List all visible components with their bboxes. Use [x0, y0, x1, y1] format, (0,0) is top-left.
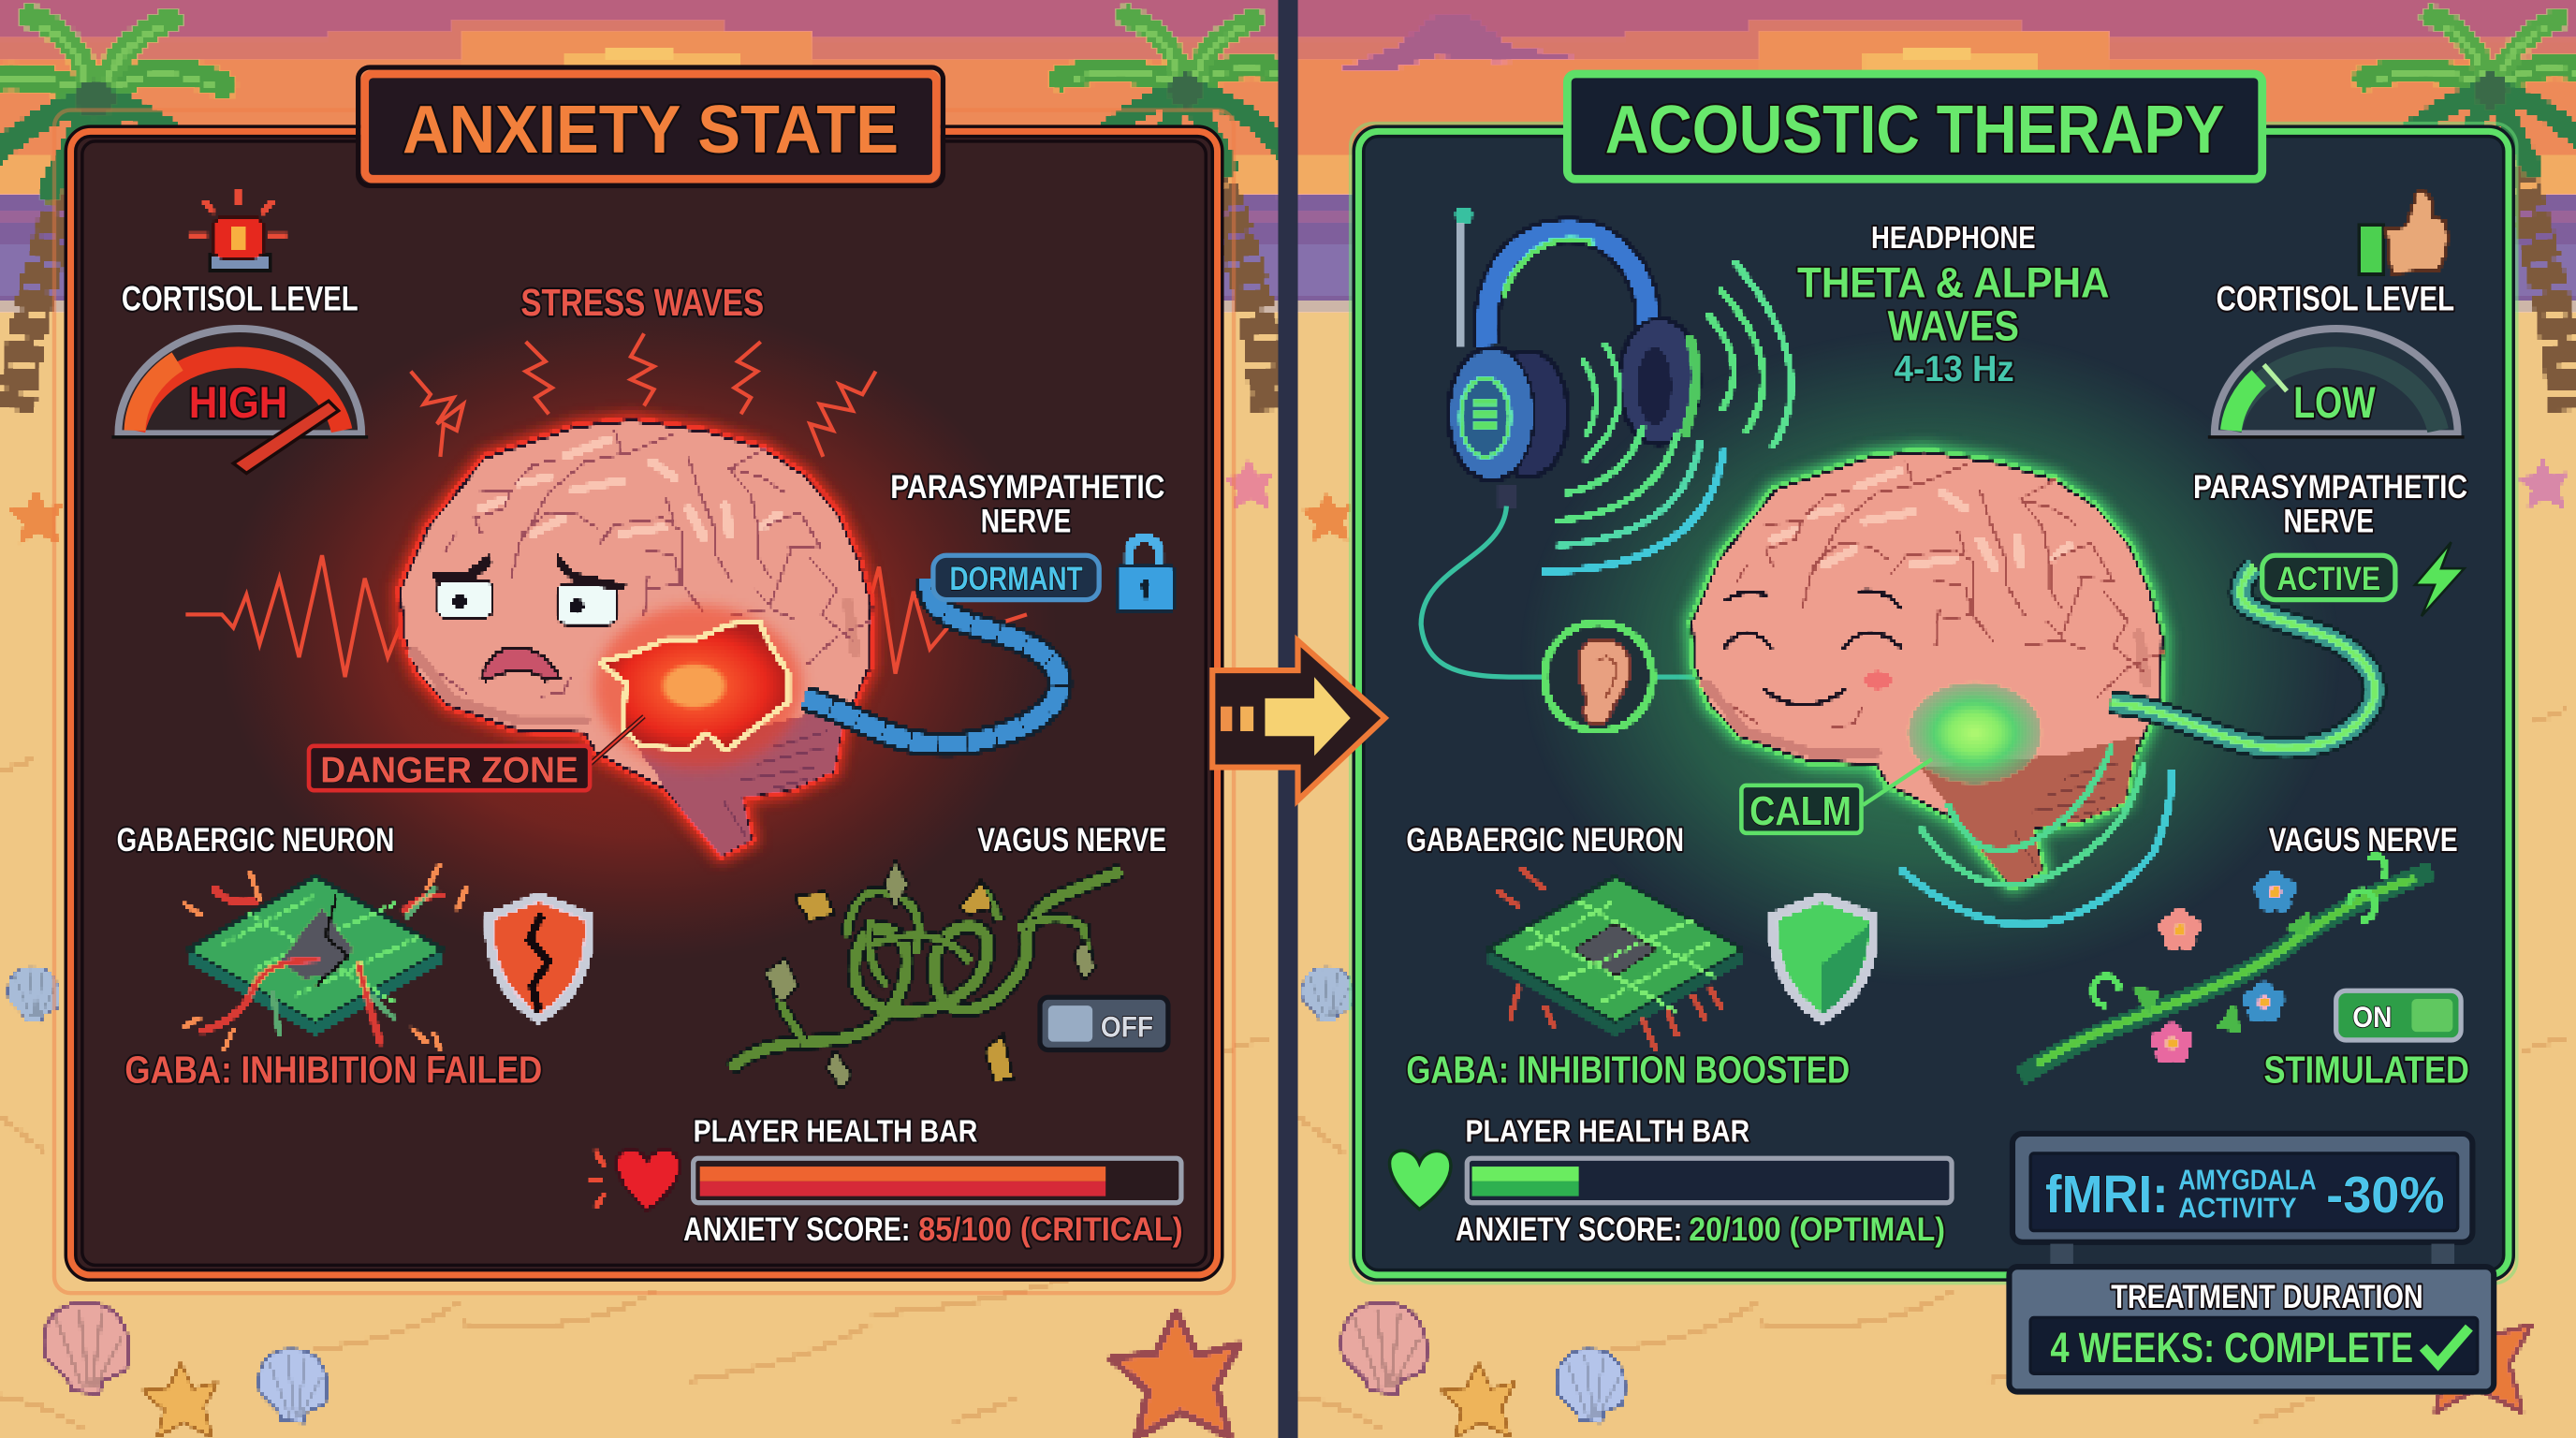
panel: treatment duration: TREATMENT DURATION — [2111, 1279, 2423, 1315]
anxiety score: critical — [683, 1211, 1183, 1248]
health bar: 20 percent — [1467, 1158, 1952, 1203]
icon: lock — [1117, 538, 1173, 611]
callout: danger zone: DANGER ZONE — [320, 750, 578, 790]
panel: treatment duration: 4 WEEKS: COMPLETE — [2050, 1324, 2413, 1372]
face: smiling — [1725, 591, 1901, 705]
illustration: blue parasympathetic nerve — [805, 579, 1060, 744]
arrow: anxiety to therapy — [1212, 640, 1385, 800]
icon: ear — [1544, 623, 1653, 731]
icon: purple cloud — [1339, 13, 1586, 69]
amygdala: calm — [1908, 682, 2042, 784]
label: frequency: 4-13 Hz — [1895, 349, 2014, 389]
label: parasympathetic nerve: PARASYMPATHETIC — [2193, 469, 2467, 506]
icon: broken chip — [184, 862, 466, 1051]
label: gabaergic neuron: GABAERGIC NEURON — [117, 822, 394, 858]
icon: healthy chip — [1488, 868, 1741, 1051]
icon: right beach palm — [1061, 17, 1301, 411]
illustration: anxious brain — [401, 420, 871, 855]
gauge: low cortisol: LOW — [2293, 378, 2376, 428]
sound waves below brain — [1902, 748, 2172, 924]
icon: palm tree — [2364, 17, 2576, 411]
panel: fMRI readout — [2012, 1134, 2472, 1267]
cerebellum and brain stem — [627, 703, 848, 855]
icon: green shield — [1773, 897, 1874, 1019]
illustration: headphones — [1449, 207, 1699, 507]
panel: fMRI readout: fMRI: — [2045, 1165, 2169, 1224]
callout: calm — [1741, 759, 1932, 834]
title: anxiety state: ANXIETY STATE — [402, 93, 899, 168]
health bar: 85 percent — [694, 1158, 1181, 1203]
cable to ear — [1421, 506, 1695, 677]
face: worried — [431, 550, 627, 681]
badge: dormant: DORMANT — [949, 561, 1083, 597]
label: theta and alpha waves: WAVES — [1888, 301, 2019, 349]
panel: acoustic therapy — [1351, 74, 2517, 1392]
icon: stress lightning waves — [411, 333, 875, 457]
label: parasympathetic nerve: PARASYMPATHETIC — [890, 469, 1164, 506]
panel: fMRI readout: ACTIVITY — [2178, 1191, 2297, 1224]
label: headphone: HEADPHONE — [1871, 221, 2036, 256]
anxiety score: optimal: ANXIETY SCORE: — [1456, 1211, 1682, 1248]
gauge: high cortisol — [111, 329, 368, 473]
badge: dormant — [933, 555, 1099, 600]
label: player health bar: PLAYER HEALTH BAR — [1466, 1115, 1749, 1150]
amygdala: danger zone — [593, 605, 803, 769]
title: acoustic therapy: ACOUSTIC THERAPY — [1605, 93, 2224, 168]
panel: fMRI readout: AMYGDALA — [2178, 1164, 2317, 1196]
label: parasympathetic nerve: NERVE — [2284, 504, 2374, 540]
label: theta and alpha waves: THETA & ALPHA — [1797, 259, 2110, 307]
panel: treatment duration — [2009, 1267, 2494, 1392]
panel: anxiety state — [54, 67, 1234, 1293]
icon: cracked shield — [490, 897, 589, 1019]
gauge: low cortisol — [2208, 329, 2465, 437]
label: vagus nerve: VAGUS NERVE — [2269, 822, 2458, 858]
label: vagus nerve: VAGUS NERVE — [977, 822, 1166, 858]
label: gabaergic neuron: GABAERGIC NEURON — [1406, 822, 1684, 858]
toggle: on — [2336, 990, 2461, 1040]
chart: left ECG wave — [185, 555, 407, 677]
badge: active: ACTIVE — [2277, 561, 2380, 597]
label: theta and alpha waves — [1797, 259, 2110, 349]
background: left beach — [0, 0, 1301, 1438]
icon: green heart — [1390, 1151, 1451, 1210]
icon: thumbs up — [2361, 191, 2447, 272]
icon: check mark — [2423, 1328, 2469, 1364]
status: gaba inhibition boosted: GABA: INHIBITION BOOSTED — [1406, 1049, 1850, 1092]
toggle: off — [1040, 997, 1168, 1049]
label: parasympathetic nerve — [2193, 469, 2467, 540]
divider — [1278, 0, 1298, 1438]
icon: siren — [191, 189, 285, 271]
sound waves from headphones — [1544, 263, 1792, 572]
illustration: calm brain — [1692, 452, 2162, 886]
label: stress waves: STRESS WAVES — [520, 281, 764, 324]
illustration: blooming vagus vine — [2021, 856, 2431, 1077]
label: parasympathetic nerve — [890, 469, 1164, 540]
icon: lightning bolt — [2415, 542, 2465, 616]
panel: fMRI readout: -30% — [2326, 1167, 2445, 1224]
illustration: tangled vagus vine — [731, 862, 1120, 1088]
callout: danger zone — [309, 716, 644, 790]
title: anxiety state — [359, 67, 943, 185]
toggle: on: ON — [2352, 1000, 2392, 1034]
anxiety score: optimal: 20/100 (OPTIMAL) — [1689, 1211, 1945, 1248]
gauge: high cortisol: HIGH — [189, 378, 287, 428]
background: right beach — [1298, 0, 2576, 1438]
chart: right ECG wave — [862, 566, 1027, 674]
anxiety score: critical: 85/100 (CRITICAL) — [918, 1211, 1183, 1248]
anxiety score: optimal — [1456, 1211, 1945, 1248]
beach decorations — [8, 460, 2568, 1437]
callout: calm: CALM — [1749, 788, 1852, 834]
icon: left beach palm — [0, 17, 224, 411]
status: stimulated: STIMULATED — [2263, 1049, 2469, 1092]
icon: red heart — [588, 1151, 679, 1210]
anxiety score: critical: ANXIETY SCORE: — [683, 1211, 910, 1248]
label: parasympathetic nerve: NERVE — [981, 504, 1071, 540]
cerebellum and brain stem — [1919, 734, 2139, 886]
label: cortisol level: CORTISOL LEVEL — [2217, 280, 2454, 318]
toggle: off: OFF — [1101, 1009, 1153, 1043]
label: cortisol level: CORTISOL LEVEL — [122, 280, 359, 318]
illustration: green parasympathetic nerve — [2111, 566, 2375, 749]
status: gaba inhibition failed: GABA: INHIBITION FAILED — [124, 1049, 542, 1092]
title: acoustic therapy — [1567, 74, 2262, 179]
label: player health bar: PLAYER HEALTH BAR — [694, 1115, 977, 1150]
